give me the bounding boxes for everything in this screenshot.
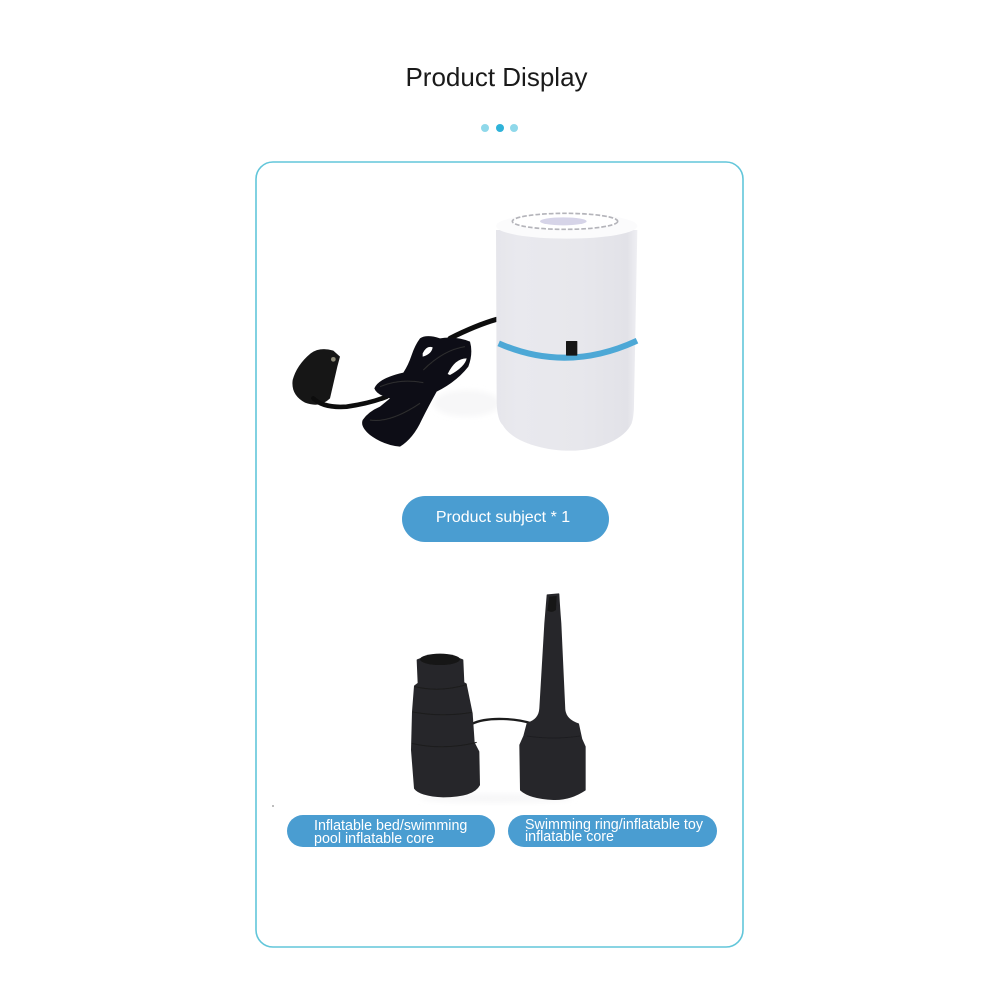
label: bed and pool core: Inflatable bed/swimming bbox=[314, 818, 467, 834]
cable coil bbox=[362, 336, 471, 447]
label: ring and toy core: inflatable core bbox=[525, 829, 614, 845]
label: bed and pool core bbox=[287, 815, 495, 847]
icon: wide nozzle bbox=[412, 654, 479, 797]
panel: product card bbox=[256, 162, 743, 947]
label: ring and toy core bbox=[508, 815, 717, 847]
label: bed and pool core: pool inflatable core bbox=[314, 831, 434, 847]
speck bbox=[272, 805, 274, 807]
blue band bbox=[499, 341, 637, 358]
cable shadow bbox=[433, 390, 500, 417]
label: product subject: Product subject * 1 bbox=[436, 509, 570, 526]
icon: car plug bbox=[292, 349, 340, 405]
icon: pointed nozzle bbox=[520, 594, 585, 799]
photo: nozzles bbox=[412, 594, 585, 803]
photo: pump with cable bbox=[292, 213, 637, 451]
label: ring and toy core: Swimming ring/inflatable toy bbox=[525, 817, 704, 833]
pagination dots bbox=[481, 124, 518, 132]
connecting strap bbox=[472, 719, 533, 724]
icon: cylinder body bbox=[496, 213, 637, 451]
title: Product Display bbox=[405, 62, 588, 92]
switch slot bbox=[566, 341, 577, 356]
power cable bbox=[313, 319, 497, 407]
label: product subject bbox=[402, 496, 609, 542]
